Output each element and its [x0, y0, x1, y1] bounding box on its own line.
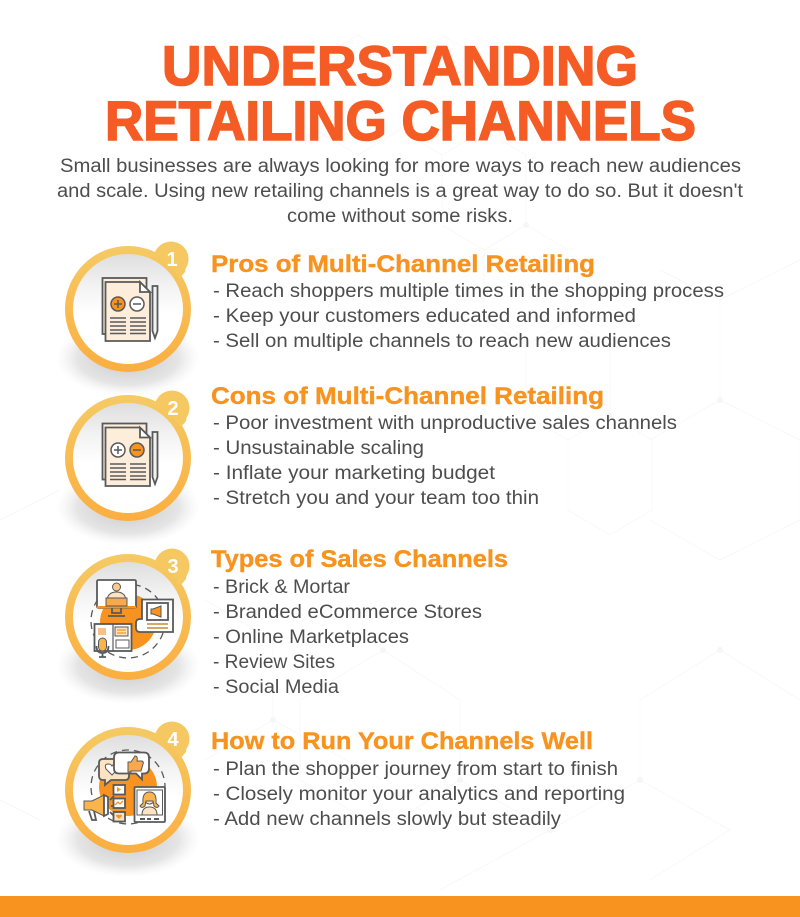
list: pros: - Keep your customers educated and informed	[213, 306, 636, 327]
intro paragraph: and scale. Using new retailing channels is a great way to do so. But it doesn't	[57, 181, 744, 202]
list: pros	[213, 281, 724, 352]
list: types: - Review Sites	[213, 652, 335, 673]
title	[105, 34, 696, 152]
footer bar	[0, 896, 800, 917]
list: pros: - Reach shoppers multiple times in the shopping process	[213, 281, 724, 302]
list: how to run: - Add new channels slowly but steadily	[213, 809, 562, 830]
background pattern nodes	[270, 222, 723, 833]
intro paragraph	[57, 156, 744, 227]
badge icon 2: cons document	[56, 390, 200, 545]
list: how to run: - Plan the shopper journey from start to finish	[213, 759, 618, 780]
heading: cons: Cons of Multi-Channel Retailing	[211, 383, 604, 410]
badge icon 4: running channels	[56, 722, 200, 877]
title: UNDERSTANDING	[162, 34, 638, 97]
list: pros: - Sell on multiple channels to reach new audiences	[213, 331, 671, 352]
heading: types: Types of Sales Channels	[211, 546, 508, 573]
badge icon 1: pros document: 1	[166, 249, 178, 271]
badge icon 1: pros document	[56, 242, 200, 396]
badge icon 3: sales channels: 3	[167, 556, 179, 578]
list: cons: - Stretch you and your team too thin	[213, 488, 539, 509]
list: cons: - Unsustainable scaling	[213, 438, 424, 459]
list: cons: - Inflate your marketing budget	[213, 463, 496, 484]
list: cons: - Poor investment with unproductive sales channels	[213, 413, 677, 434]
list: types	[213, 577, 482, 698]
heading: pros: Pros of Multi-Channel Retailing	[211, 251, 595, 278]
title: RETAILING CHANNELS	[105, 89, 696, 152]
badge icon 4: running channels: 4	[167, 729, 179, 751]
list: types: - Social Media	[213, 677, 339, 698]
list: types: - Brick & Mortar	[213, 577, 351, 598]
heading: how to run: How to Run Your Channels Well	[211, 728, 593, 755]
list: types: - Online Marketplaces	[213, 627, 409, 648]
list: how to run	[213, 759, 625, 830]
badge icon 3: sales channels	[56, 548, 200, 704]
list: how to run: - Closely monitor your analytics and reporting	[213, 784, 625, 805]
list: types: - Branded eCommerce Stores	[213, 602, 482, 623]
intro paragraph: come without some risks.	[287, 206, 513, 227]
intro paragraph: Small businesses are always looking for more ways to reach new audiences	[60, 156, 741, 177]
list: cons	[213, 413, 677, 509]
badge icon 2: cons document: 2	[167, 398, 179, 420]
